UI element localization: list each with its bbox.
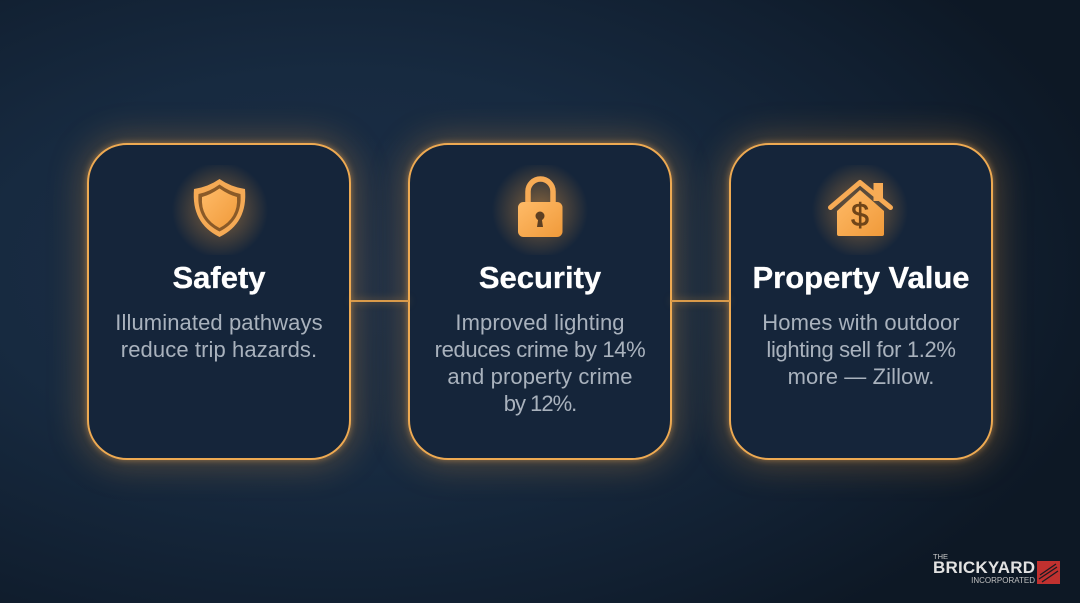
panel: property value [729, 143, 993, 460]
heading: property value: Property Value [752, 260, 970, 295]
panel: security [408, 143, 672, 460]
text: property value description: more — Zillow. [788, 364, 934, 389]
text: safety description [115, 310, 323, 362]
text: security description: reduces crime by 14% [435, 337, 645, 362]
icon: house with dollar sign [816, 166, 904, 254]
heading: security: Security [479, 260, 601, 295]
text: security description: Improved lighting [455, 310, 625, 335]
panel: safety [87, 143, 351, 460]
text: property value description: lighting sell for 1.2% [766, 337, 956, 362]
text: security description [435, 310, 645, 416]
logo: The Brickyard Incorporated: INCORPORATED [971, 576, 1035, 585]
text: security description: by 12%. [504, 391, 576, 416]
text: property value description [762, 310, 960, 389]
text: security description: and property crime [447, 364, 633, 389]
icon: shield [176, 166, 264, 254]
logo: The Brickyard Incorporated: THE [933, 552, 948, 561]
text: safety description: Illuminated pathways [115, 310, 323, 335]
logo: The Brickyard Incorporated: BRICKYARD [933, 558, 1035, 577]
text: property value description: Homes with outdoor [762, 310, 960, 335]
logo mark [1037, 561, 1060, 584]
logo: The Brickyard Incorporated [933, 552, 1060, 585]
dollar sign: $ [851, 196, 869, 232]
text: safety description: reduce trip hazards. [121, 337, 317, 362]
heading: safety: Safety [172, 260, 266, 295]
icon: padlock [496, 166, 584, 254]
connector: security to property value [671, 300, 730, 302]
connector: safety to security [351, 300, 409, 302]
